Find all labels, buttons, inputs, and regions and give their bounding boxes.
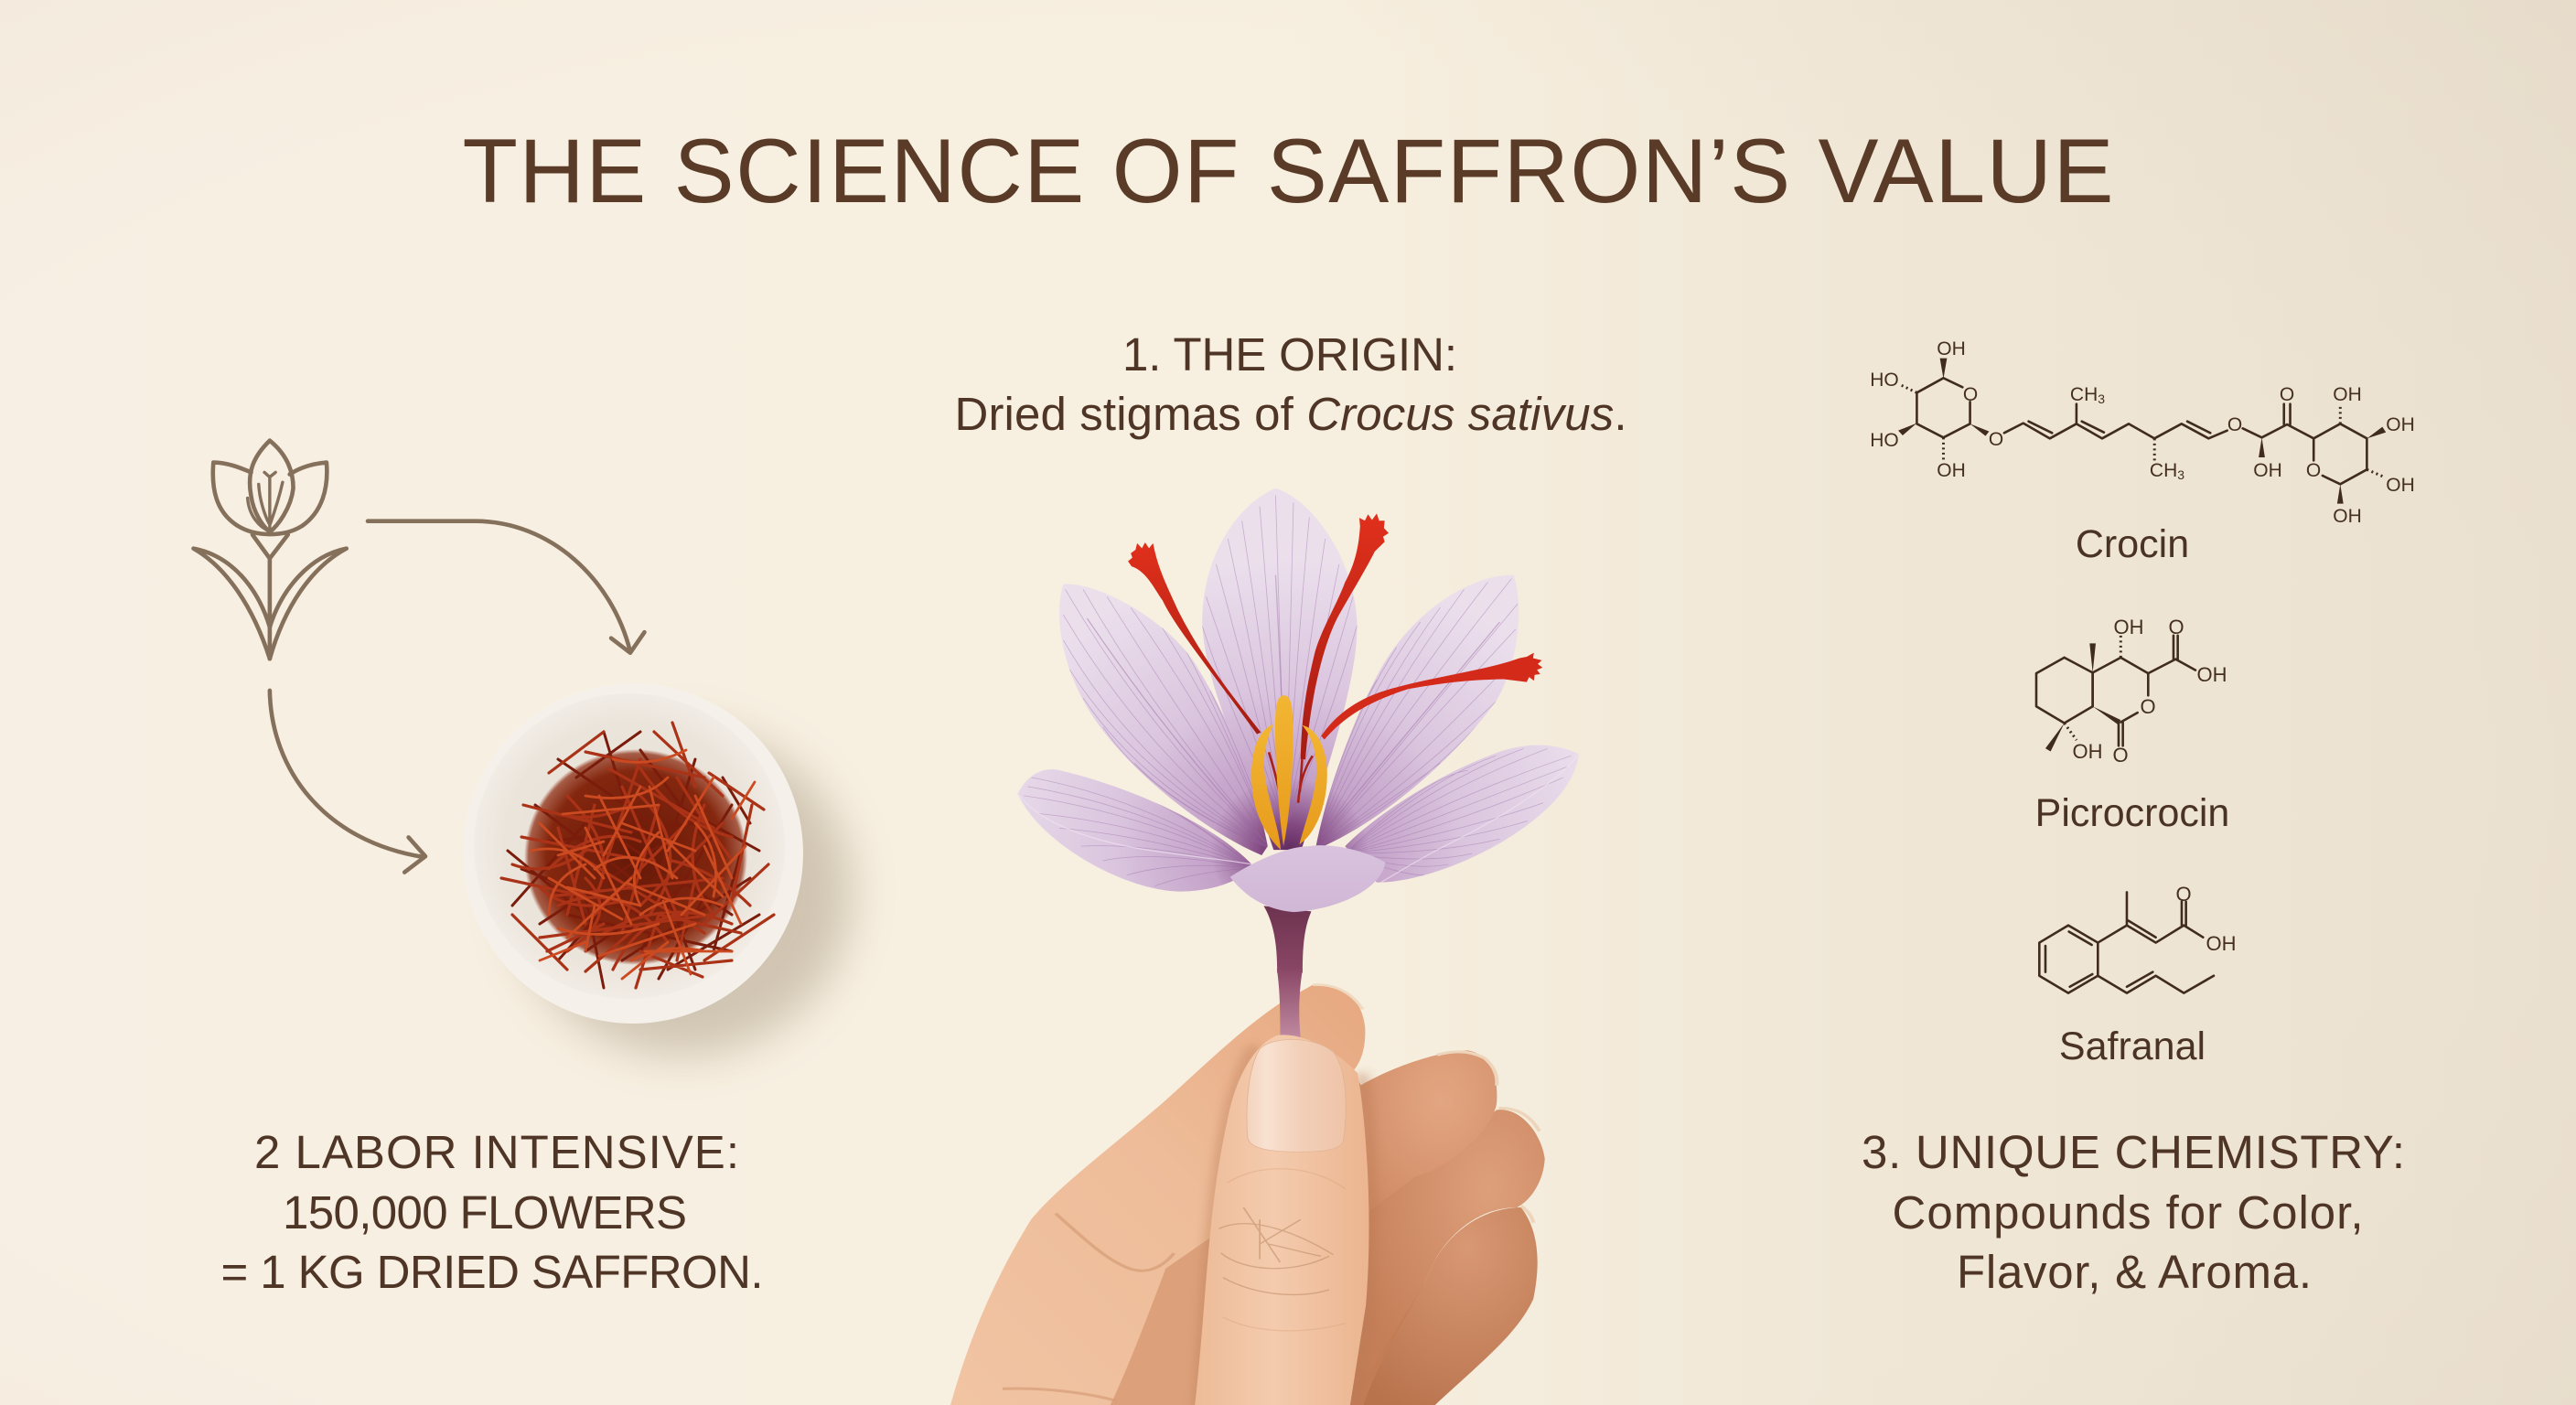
picrocrocin hashed bonds bbox=[2065, 636, 2120, 740]
finger: middle bbox=[1358, 1050, 1497, 1217]
stigma: left bbox=[1128, 542, 1261, 735]
chemical structure: crocin: OH bbox=[1937, 460, 1966, 481]
petal: lower right bbox=[1345, 745, 1579, 883]
chemical structure: crocin: O bbox=[2227, 414, 2242, 435]
chemical structure: picrocrocin: O bbox=[2112, 744, 2129, 767]
flower: saffron crocus bbox=[1018, 488, 1579, 973]
chemical structure: picrocrocin: O bbox=[2140, 695, 2156, 718]
title: THE SCIENCE OF SAFFRON’S VALUE bbox=[463, 120, 2113, 221]
label: crocin: Crocin bbox=[2076, 522, 2189, 566]
text block: the origin: 1. THE ORIGIN: bbox=[1122, 328, 1457, 381]
saffron threads: bright bbox=[531, 750, 755, 979]
chemical structure: crocin: O bbox=[2280, 384, 2294, 405]
chemical structure: crocin: CH bbox=[2150, 460, 2177, 481]
chemical structure: picrocrocin: O bbox=[2168, 616, 2184, 638]
arrow: flower to bowl, bottom bbox=[270, 691, 425, 873]
finger: fourth bbox=[1362, 1207, 1538, 1405]
chemical structure: picrocrocin bbox=[2036, 616, 2227, 767]
chemical structure: safranal bbox=[2039, 883, 2236, 993]
text block: labor intensive: = 1 KG DRIED SAFFRON. bbox=[221, 1246, 763, 1298]
petal: front bbox=[1230, 845, 1386, 912]
chemical structure: crocin: O bbox=[2306, 460, 2321, 481]
petal: lower left bbox=[1018, 769, 1254, 892]
finger: third bbox=[1358, 1110, 1545, 1372]
chemical structure: crocin: OH bbox=[2333, 506, 2362, 527]
stigma threads, lower bbox=[1269, 752, 1313, 831]
petal: back bbox=[1202, 488, 1357, 850]
hand holding the flower bbox=[950, 969, 1545, 1405]
chemical structure: crocin: OH bbox=[2253, 460, 2282, 481]
petal: upper right bbox=[1314, 575, 1519, 850]
chemical structure: crocin: CH bbox=[2070, 384, 2098, 405]
crocin bonds bbox=[1916, 378, 2367, 484]
text block: unique chemistry: Flavor, & Aroma. bbox=[1957, 1246, 2312, 1298]
chemical structure: crocin: OH bbox=[1937, 338, 1966, 359]
chemical structure: crocin bbox=[1870, 338, 2415, 527]
text block: unique chemistry bbox=[1862, 1126, 2405, 1298]
palm and index finger bbox=[950, 984, 1365, 1405]
safranal bonds bbox=[2039, 892, 2214, 993]
icon: crocus line drawing bbox=[194, 441, 347, 659]
palm under the index finger bbox=[1109, 1232, 1218, 1405]
text block: labor intensive: 2 LABOR INTENSIVE: bbox=[254, 1126, 739, 1178]
chemical structure: crocin: HO bbox=[1870, 430, 1899, 451]
chemical structure: crocin: OH bbox=[2386, 475, 2415, 496]
saffron threads: dark bbox=[508, 732, 759, 988]
text block: unique chemistry: Compounds for Color, bbox=[1892, 1186, 2364, 1239]
chemical structure: crocin: HO bbox=[1870, 370, 1899, 391]
chemical structure: safranal: O bbox=[2175, 883, 2192, 906]
text block: the origin bbox=[955, 328, 1626, 440]
label: picrocrocin: Picrocrocin bbox=[2035, 791, 2229, 835]
saffron threads: mid bbox=[501, 723, 774, 988]
stigma: middle bbox=[1301, 513, 1389, 759]
chemical structure: picrocrocin: OH bbox=[2113, 616, 2144, 638]
arrow: flower to bowl, top bbox=[368, 521, 644, 653]
thumbnail bbox=[1247, 1039, 1346, 1152]
thumb bbox=[1195, 1035, 1368, 1405]
text block: labor intensive: 150,000 FLOWERS bbox=[283, 1186, 687, 1239]
chemical structure: crocin: OH bbox=[2386, 414, 2415, 435]
chemical structure: crocin: O bbox=[1989, 429, 2003, 450]
bowl of dried saffron bbox=[463, 683, 851, 1055]
chemical structure: crocin: OH bbox=[2333, 384, 2362, 405]
stigma: right bbox=[1321, 653, 1542, 740]
text block: the origin: Dried stigmas of Crocus sativus. bbox=[955, 388, 1626, 440]
text block: unique chemistry: 3. UNIQUE CHEMISTRY: bbox=[1862, 1126, 2405, 1178]
text block: labor intensive bbox=[221, 1126, 763, 1298]
chemical structure: crocin: 3 bbox=[2098, 391, 2105, 406]
stem in grip bbox=[1277, 969, 1303, 1038]
crocin hashed bonds bbox=[1899, 384, 2385, 477]
anthers bbox=[1251, 695, 1327, 850]
crocin wedge bonds bbox=[1898, 359, 2386, 504]
chemical structure: crocin: O bbox=[1963, 384, 1978, 405]
chemical structure: crocin: 3 bbox=[2177, 467, 2184, 482]
picrocrocin bonds bbox=[2036, 636, 2195, 745]
petal: upper left bbox=[1059, 584, 1273, 855]
chemical structure: picrocrocin: OH bbox=[2073, 740, 2102, 763]
thumb shadow bbox=[1198, 1046, 1370, 1405]
knuckle wrinkles bbox=[1218, 1207, 1333, 1294]
shading behind the fingers bbox=[1341, 1079, 1440, 1405]
stem bbox=[1263, 906, 1311, 973]
label: safranal: Safranal bbox=[2059, 1024, 2206, 1068]
chemical structure: picrocrocin: OH bbox=[2197, 663, 2227, 686]
picrocrocin wedge bonds bbox=[2045, 643, 2120, 752]
chemical structure: safranal: OH bbox=[2206, 932, 2236, 955]
